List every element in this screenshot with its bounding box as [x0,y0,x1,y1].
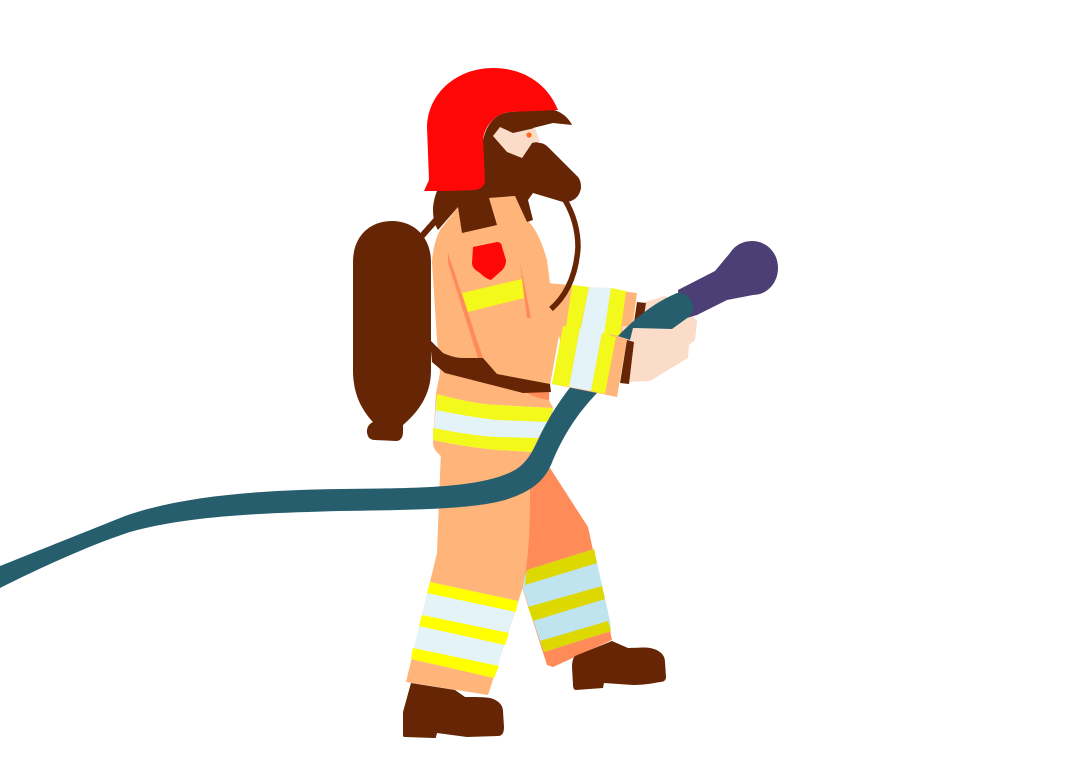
nozzle [678,241,778,320]
face [493,127,540,158]
orange seam right [520,262,531,318]
badge [472,242,506,280]
hose [0,385,600,588]
hose end at nozzle [618,293,693,340]
lower hand [622,320,697,382]
lower sleeve [552,326,634,397]
upper hand [640,296,697,345]
helmet hood and mask [433,109,581,233]
back leg [522,468,612,667]
back boot [572,641,666,690]
waist band [433,394,553,452]
icon: air tank [353,220,436,441]
front leg [406,450,530,695]
orange shadow under belt [527,391,549,400]
shoulder stripe [462,279,524,312]
helmet [424,68,558,191]
front boot [403,683,504,738]
orange seam left [448,253,483,358]
torso [430,196,572,456]
belt strap [430,340,551,393]
eye [526,132,532,138]
upper sleeve [545,283,646,345]
cuff [620,340,634,384]
breathing tube [551,200,578,309]
